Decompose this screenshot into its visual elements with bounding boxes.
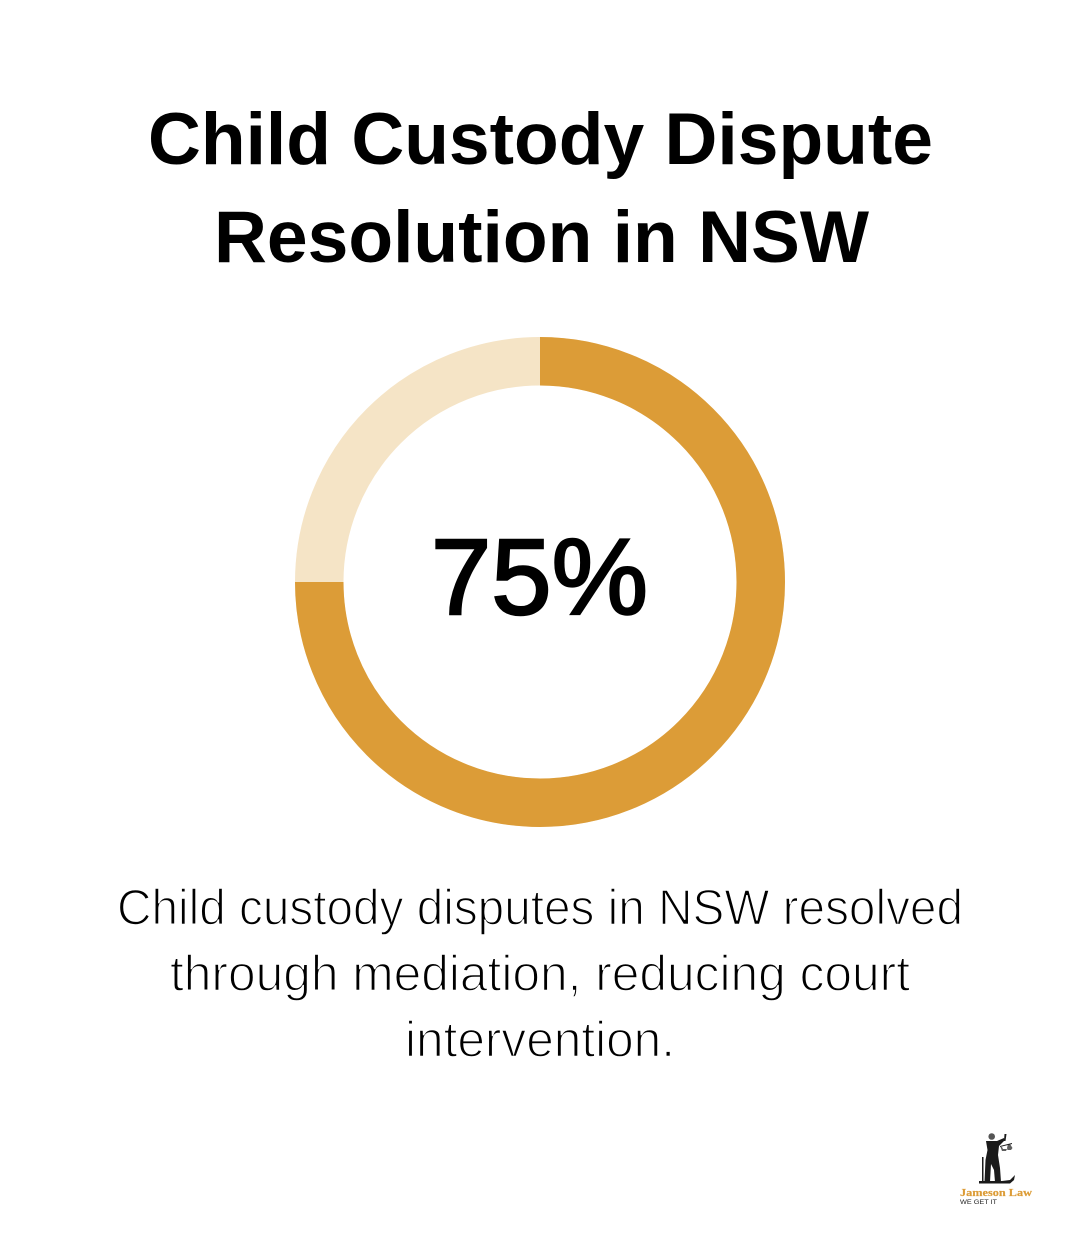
logo tagline: WE GET IT bbox=[960, 1199, 997, 1206]
icon: lady justice bbox=[979, 1133, 1015, 1184]
donut chart: 75 percent bbox=[319, 361, 761, 803]
title bbox=[148, 99, 933, 278]
description: intervention. bbox=[405, 1012, 675, 1068]
logo name: Jameson Law bbox=[960, 1188, 1032, 1199]
logo: Jameson Law bbox=[960, 1133, 1032, 1206]
description: through mediation, reducing court bbox=[170, 946, 910, 1002]
description: Child custody disputes in NSW resolved bbox=[117, 880, 963, 936]
donut value: 75% bbox=[431, 516, 648, 637]
title: Resolution in NSW bbox=[214, 197, 869, 278]
title: Child Custody Dispute bbox=[148, 99, 933, 180]
description bbox=[117, 880, 963, 1068]
